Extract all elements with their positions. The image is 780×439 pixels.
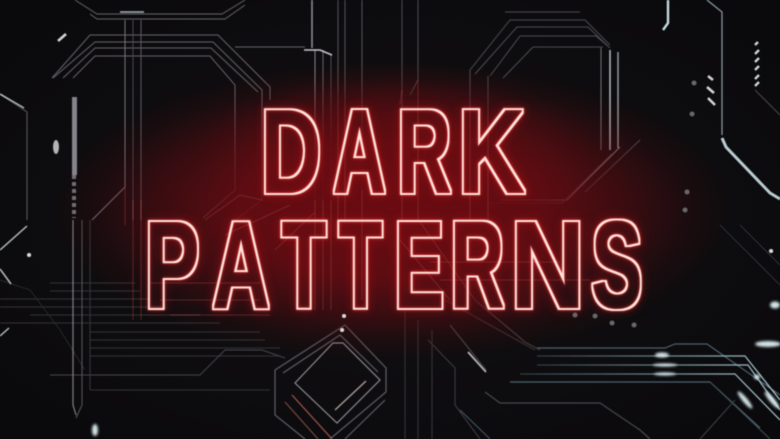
red glow behind the title: [52, 60, 732, 360]
circuit lines: top right octagon: [400, 0, 780, 203]
icon: left vertical light bar: [72, 97, 77, 175]
icon: diagonal sparks: [58, 34, 715, 105]
heading line: DARK: R: [398, 86, 451, 218]
icon: angled streak: [468, 352, 486, 372]
heading line: DARK: D: [261, 86, 321, 218]
icon: left edge white traces: [0, 94, 27, 336]
icon: left vertical dashes: [72, 175, 76, 218]
heading line: DARK: A: [334, 86, 386, 218]
icon: white zigzag dashes: [755, 42, 759, 86]
icon: white dots: [29, 251, 771, 330]
circuit lines: lower left bus: [0, 220, 285, 418]
heading line: PATTERNS: R: [450, 196, 504, 334]
icon: flare highlights: [92, 302, 780, 436]
circuit lines: centre bottom diamond: [275, 325, 386, 439]
circuit lines: lower right bus: [405, 225, 780, 439]
title: dark patterns neon lettering: [145, 86, 642, 334]
heading line: PATTERNS: N: [510, 196, 585, 334]
circuit lines: top left octagon: [0, 0, 362, 220]
heading line: PATTERNS: P: [145, 196, 199, 334]
faint traces visible through the glow: [125, 80, 590, 320]
icon: grey dots: [575, 83, 694, 325]
icon: hook trace: [663, 0, 668, 30]
heading line: PATTERNS: T: [339, 196, 382, 334]
heading line: PATTERNS: T: [282, 196, 326, 334]
heading line: PATTERNS: E: [394, 196, 444, 334]
icon: small white oval: [53, 140, 59, 154]
heading line: DARK: K: [458, 86, 525, 218]
icon: upper right thick trace: [722, 138, 780, 199]
heading line: PATTERNS: A: [212, 196, 270, 334]
heading line: PATTERNS: S: [592, 196, 642, 334]
